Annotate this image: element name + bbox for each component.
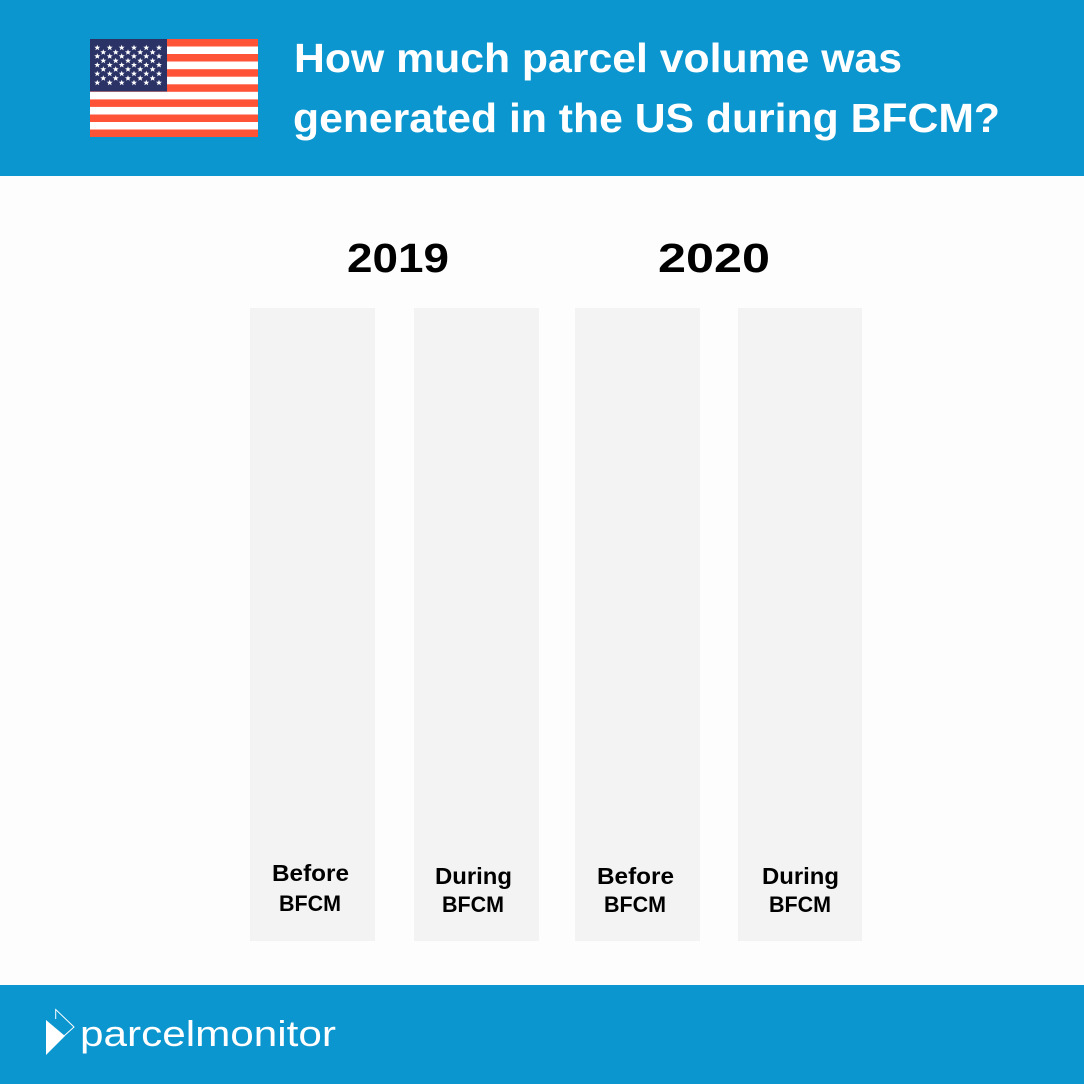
bar: 2020 before BFCM: BFCM (604, 892, 666, 917)
bar: 2020 before BFCM: Before (597, 863, 674, 889)
heading: 2019: 2019 (347, 235, 449, 281)
bar: 2020 during BFCM: BFCM (769, 892, 831, 917)
heading: 2020: 2020 (658, 235, 770, 281)
bar: 2020 during BFCM: During (762, 863, 839, 889)
bar: 2019 during BFCM: During (435, 863, 512, 889)
bar: 2020 before BFCM (575, 308, 700, 941)
bar: 2019 before BFCM (250, 308, 375, 941)
title: generated in the US during BFCM? (293, 95, 1000, 141)
bar: 2019 during BFCM (414, 308, 539, 941)
header band (0, 0, 1084, 176)
bar: 2019 during BFCM: BFCM (442, 892, 504, 917)
bar: 2020 during BFCM (738, 308, 862, 941)
bar: 2019 before BFCM: BFCM (279, 891, 341, 916)
icon: parcelmonitor logo mark (46, 1010, 74, 1055)
bar: 2019 before BFCM: Before (272, 860, 349, 886)
title: How much parcel volume was (294, 35, 902, 81)
title (293, 35, 1000, 141)
footer band (0, 985, 1084, 1084)
logo wordmark: parcelmonitor (80, 1013, 336, 1054)
icon: US flag (90, 39, 258, 137)
